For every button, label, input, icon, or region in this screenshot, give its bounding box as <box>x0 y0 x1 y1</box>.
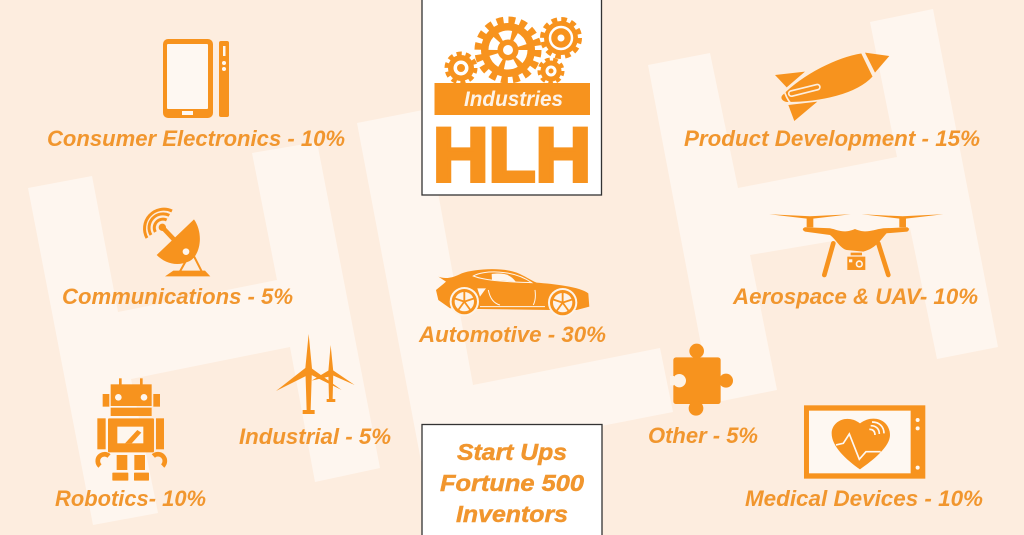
item: automotive <box>418 269 606 347</box>
item: automotive: Automotive - 30% <box>418 322 606 347</box>
icon: sports car <box>436 269 589 317</box>
item: product development: Product Development - 15% <box>684 126 980 151</box>
icon: rocket <box>775 53 889 121</box>
orange band with title <box>434 83 590 115</box>
panel: customer types: Inventors <box>456 501 568 527</box>
icon: puzzle piece <box>670 344 733 416</box>
icon: gears <box>447 20 580 82</box>
icon: robot <box>97 378 165 481</box>
panel: customer types: Start Ups <box>457 439 567 465</box>
orange band with title: Industries <box>464 88 563 111</box>
icon: heart monitor tablet <box>804 405 925 479</box>
item: communications <box>62 209 293 309</box>
item: other <box>648 344 758 448</box>
item: consumer electronics <box>47 39 345 151</box>
item: communications: Communications - 5% <box>62 284 293 309</box>
item: industrial: Industrial - 5% <box>239 424 391 449</box>
icon: drone <box>769 214 943 275</box>
item: medical devices: Medical Devices - 10% <box>745 486 983 511</box>
icon: wind turbines <box>276 334 355 414</box>
HLH wordmark: HLH <box>433 113 591 198</box>
item: robotics: Robotics- 10% <box>55 486 206 511</box>
panel: customer types: Fortune 500 <box>440 470 584 496</box>
item: industrial <box>239 334 391 449</box>
item: other: Other - 5% <box>648 423 758 448</box>
panel: customer types <box>422 424 602 535</box>
item: consumer electronics: Consumer Electronics - 10% <box>47 126 345 151</box>
item: medical devices <box>745 405 983 511</box>
item: aerospace and UAV: Aerospace & UAV- 10% <box>732 284 978 309</box>
item: product development <box>684 53 980 151</box>
icon: tablet and phone side <box>163 39 229 118</box>
logo panel: HLH Industries <box>422 0 602 198</box>
icon: satellite dish <box>145 209 210 276</box>
item: aerospace and UAV <box>732 214 978 309</box>
item: robotics <box>55 378 206 511</box>
